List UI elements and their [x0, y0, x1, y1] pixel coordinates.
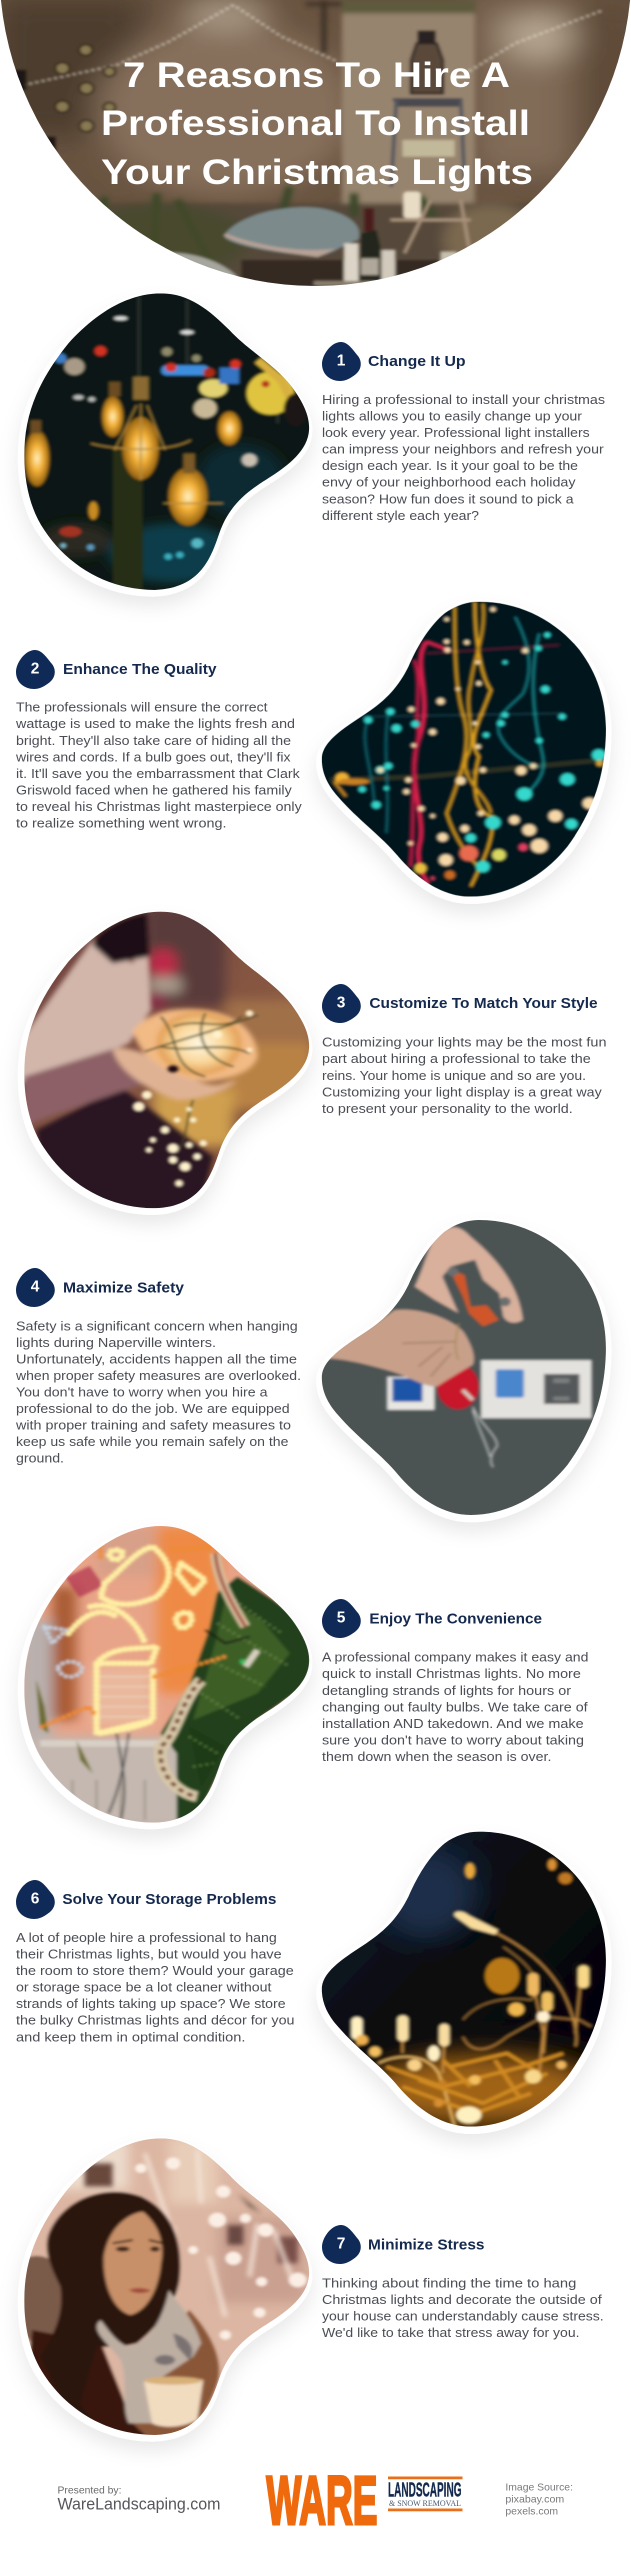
number badge 3: [322, 984, 361, 1023]
body text: different style each year?: [322, 509, 479, 523]
body text: changing out faulty bulbs. We take care of: [322, 1700, 588, 1714]
body text: them down when the season is over.: [322, 1750, 551, 1764]
hair: [40, 2192, 180, 2433]
panel: reason 1: [0, 280, 605, 600]
body text: Hiring a professional to install your christmas: [322, 393, 605, 407]
number badge 2: [16, 650, 55, 689]
number badge 7: 7: [337, 2236, 345, 2252]
photo: hands holding glowing lights: [0, 900, 322, 1220]
number badge 6: [16, 1880, 55, 1919]
body text: their Christmas lights, but would you have: [16, 1948, 282, 1962]
body text: with proper training and safety measures to: [15, 1419, 291, 1433]
body text: season? How fun does it sound to pick a: [322, 492, 574, 506]
number badge 7: [322, 2225, 361, 2264]
body text: lights allows you to easily change up your: [322, 410, 582, 424]
body text: envy of your neighborhood each holiday: [322, 476, 576, 490]
body text: strands of lights taking up space? We store: [16, 1997, 286, 2011]
body text: [322, 1651, 588, 1764]
striped ribbon garland: [160, 1553, 258, 1797]
body text: We'd like to take that stress away for you.: [322, 2326, 580, 2340]
body text: [322, 393, 605, 523]
body text: or storage space be a lot cleaner without: [16, 1981, 272, 1995]
pliers: [449, 1268, 499, 1327]
logo: Ware Landscaping and Snow Removal: WARE: [266, 2462, 377, 2539]
number badge 2: 2: [31, 660, 39, 678]
panel: reason 5: [0, 1520, 588, 1840]
body text: Unfortunately, accidents happen all the time: [16, 1352, 297, 1366]
lower hand: [322, 1310, 474, 1387]
photo: hands wiring an electrical socket: [314, 1210, 620, 1530]
body text: it. It'll save you the embarrassment that Clark: [16, 767, 300, 781]
plants: [98, 184, 438, 218]
pillow, blanket, bottle, candles: [171, 190, 472, 286]
body text: [322, 1036, 606, 1116]
body text: installation AND takedown. And we make: [322, 1717, 584, 1731]
body text: quick to install Christmas lights. No more: [322, 1667, 581, 1681]
title: Professional To Install: [101, 104, 530, 143]
title: [101, 56, 533, 192]
image source: pixabay.com: [505, 2494, 564, 2506]
body text: [15, 701, 302, 830]
body text: and keep them in optimal condition.: [16, 2030, 245, 2044]
body text: wires and cords. If a bulb goes out, they'll fix: [15, 750, 291, 764]
heading: Customize To Match Your Style: [369, 996, 598, 1012]
body text: Christmas lights and decorate the outside of: [322, 2293, 602, 2307]
number badge 5: [322, 1599, 361, 1638]
title: Your Christmas Lights: [101, 153, 533, 192]
body text: Griswold faced when he gathered his family: [16, 783, 292, 797]
body text: reins. Your home is unique and so are you.: [322, 1069, 586, 1083]
number badge 5: 5: [337, 1610, 346, 1626]
heading: Enhance The Quality: [63, 662, 217, 678]
body text: keep us safe while you remain safely on the: [16, 1435, 288, 1449]
body text: [322, 2276, 604, 2340]
photo: woman with hot drink among lights: [0, 2130, 322, 2450]
photo: house decorated with rope lights and garland: [0, 1520, 322, 1840]
number badge 4: 4: [31, 1278, 40, 1296]
panel: reason 2: [15, 600, 620, 907]
body text: ground.: [16, 1452, 64, 1466]
photo: hanging edison bulbs: [0, 280, 322, 600]
body text: to realize something went wrong.: [16, 816, 226, 830]
body text: bright. They'll also take care of hiding all the: [16, 734, 291, 748]
heading: Solve Your Storage Problems: [62, 1892, 276, 1908]
presented by: WareLandscaping.com: [58, 2494, 220, 2514]
body text: Customizing your light display is a great way: [322, 1085, 602, 1099]
body text: A lot of people hire a professional to hang: [16, 1931, 277, 1945]
body text: professional to do the job. We are equipped: [16, 1402, 290, 1416]
body text: your house can understandably cause stress.: [322, 2309, 604, 2323]
body text: the room to store them? Would your garage: [16, 1964, 294, 1978]
image source: pexels.com: [505, 2506, 558, 2518]
panel: reason 4: [15, 1210, 620, 1530]
number badge 4: [16, 1268, 55, 1307]
body text: Safety is a significant concern when hanging: [16, 1319, 298, 1333]
body text: lights during Naperville winters.: [16, 1336, 216, 1350]
image source: Image Source:: [505, 2482, 573, 2494]
body text: A professional company makes it easy and: [322, 1651, 588, 1665]
photo: warm fairy lights on dark background: [314, 1820, 620, 2140]
body text: Thinking about finding the time to hang: [322, 2276, 576, 2290]
heading: Change It Up: [368, 354, 466, 370]
body text: to present your personality to the world.: [322, 1102, 573, 1116]
photo: colourful strands of lights: [314, 600, 620, 907]
panel: reason 7: [0, 2130, 604, 2450]
presented by: [58, 2484, 220, 2514]
hero: circular photo with title: [0, 0, 631, 307]
body text: wattage is used to make the lights fresh and: [15, 717, 295, 731]
upper hand: [414, 1227, 523, 1323]
body text: the bulky Christmas lights and décor for you: [16, 2014, 294, 2028]
body text: part about hiring a professional to take the: [322, 1052, 591, 1066]
title: 7 Reasons To Hire A: [123, 56, 510, 95]
number badge 3: 3: [337, 994, 346, 1012]
panel: reason 6: [16, 1820, 620, 2140]
body text: sure you don't have to worry about taking: [322, 1733, 584, 1747]
string lights: [24, 5, 604, 85]
body text: can impress your neighbors and refresh your: [322, 443, 604, 457]
body text: look every year. Professional light installers: [322, 426, 590, 440]
footer: LANDSCAPING: [388, 2478, 462, 2502]
hero photo: cosy room with string lights: [0, 0, 631, 307]
heading: Minimize Stress: [368, 2237, 484, 2253]
logo: Ware Landscaping and Snow Removal: & SNOW REMOVAL: [389, 2499, 461, 2508]
number badge 1: [322, 342, 361, 381]
body text: [15, 1319, 301, 1466]
cup: [144, 2378, 203, 2427]
body text: The professionals will ensure the correct: [16, 701, 268, 715]
presented by: Presented by:: [58, 2484, 122, 2496]
body text: Customizing your lights may be the most fun: [322, 1036, 606, 1050]
image source: [505, 2482, 573, 2518]
panel: reason 3: [0, 900, 606, 1220]
heading: Maximize Safety: [63, 1280, 185, 1296]
socket strip: [387, 1377, 435, 1410]
tree: [161, 1577, 314, 1830]
body text: design each year. Is it your goal to be the: [322, 459, 578, 473]
heading: Enjoy The Convenience: [369, 1611, 542, 1627]
rope lights: [68, 1547, 205, 1733]
body text: detangling strands of lights for hours or: [322, 1684, 571, 1698]
footer: [58, 2462, 573, 2539]
wall plates: [56, 45, 115, 132]
coat: [20, 2256, 72, 2370]
body text: You don't have to worry when you hire a: [16, 1386, 268, 1400]
lantern and stand: [391, 31, 465, 187]
body text: [16, 1931, 294, 2044]
number badge 1: 1: [337, 352, 346, 370]
number badge 6: 6: [31, 1890, 40, 1908]
body text: when proper safety measures are overlooked.: [15, 1369, 301, 1383]
scarf: [97, 2290, 201, 2423]
body text: to reveal his Christmas light masterpiece only: [16, 800, 302, 814]
